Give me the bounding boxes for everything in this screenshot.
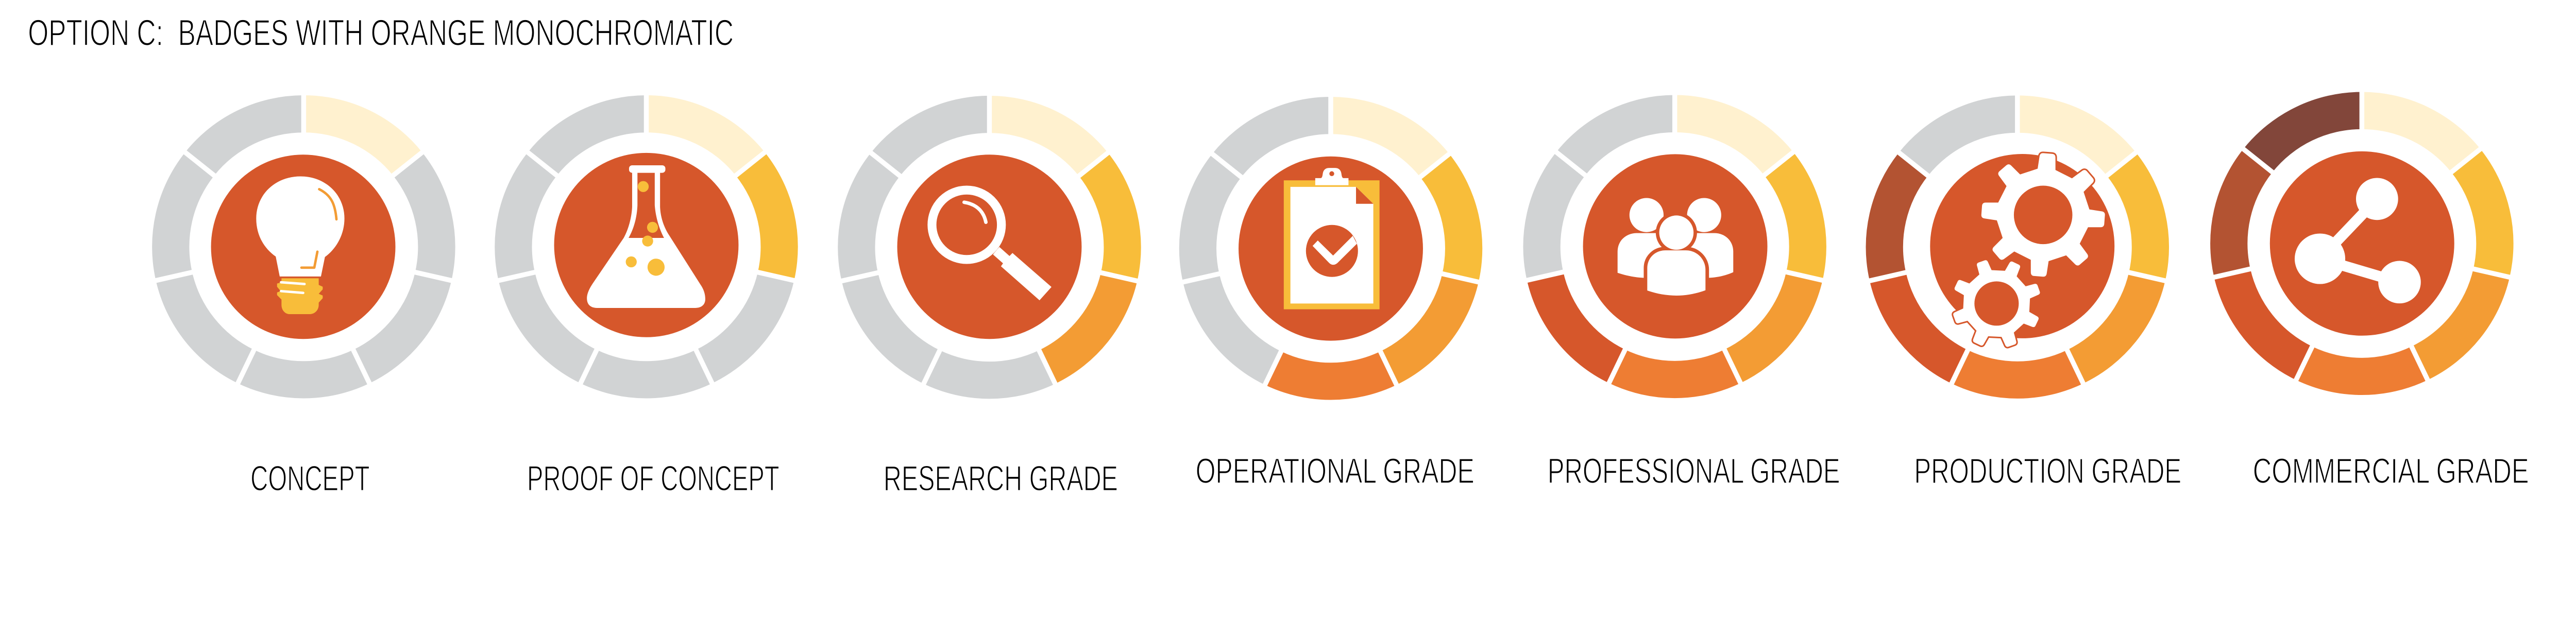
- badge: professional grade: [1523, 92, 1826, 398]
- badge: concept: [152, 92, 455, 399]
- icon: flask: [587, 165, 705, 308]
- center disc: [897, 154, 1081, 339]
- label: research grade: RESEARCH GRADE: [884, 459, 1118, 498]
- icon: light bulb: [256, 176, 345, 314]
- icon: clipboard: [1284, 168, 1380, 310]
- center disc: [1930, 154, 2114, 338]
- icon: gears: [1937, 149, 2109, 363]
- segmented ring: 4 of 7: [1179, 93, 1482, 400]
- center disc: [2270, 151, 2454, 336]
- center disc: [211, 154, 395, 339]
- badge: commercial grade: [2210, 89, 2514, 395]
- label: operational grade: OPERATIONAL GRADE: [1196, 452, 1475, 491]
- segmented ring: 1 of 7: [152, 92, 455, 399]
- icon: people: [1618, 198, 1733, 296]
- segmented ring: 6 of 7: [1866, 92, 2169, 399]
- badge: operational grade: [1179, 93, 1482, 400]
- icon: share network: [2295, 178, 2421, 303]
- badge: proof of concept: [495, 92, 798, 399]
- center disc: [1583, 154, 1768, 338]
- title: OPTION C: BADGES WITH ORANGE MONOCHROMATIC: [28, 13, 734, 54]
- segmented ring: 3 of 7: [838, 92, 1141, 399]
- icon: magnifying glass: [932, 190, 1052, 300]
- label: production grade: PRODUCTION GRADE: [1914, 452, 2181, 491]
- center disc: [554, 153, 738, 337]
- segmented ring: 5 of 7: [1523, 92, 1826, 398]
- segmented ring: 7 of 7: [2210, 89, 2514, 395]
- badge: research grade: [838, 92, 1141, 399]
- label: professional grade: PROFESSIONAL GRADE: [1548, 452, 1840, 491]
- badge: production grade: [1866, 92, 2169, 399]
- label: proof of concept: PROOF OF CONCEPT: [527, 459, 779, 498]
- label: concept: CONCEPT: [250, 459, 370, 498]
- center disc: [1239, 157, 1423, 341]
- segmented ring: 2 of 7: [495, 92, 798, 399]
